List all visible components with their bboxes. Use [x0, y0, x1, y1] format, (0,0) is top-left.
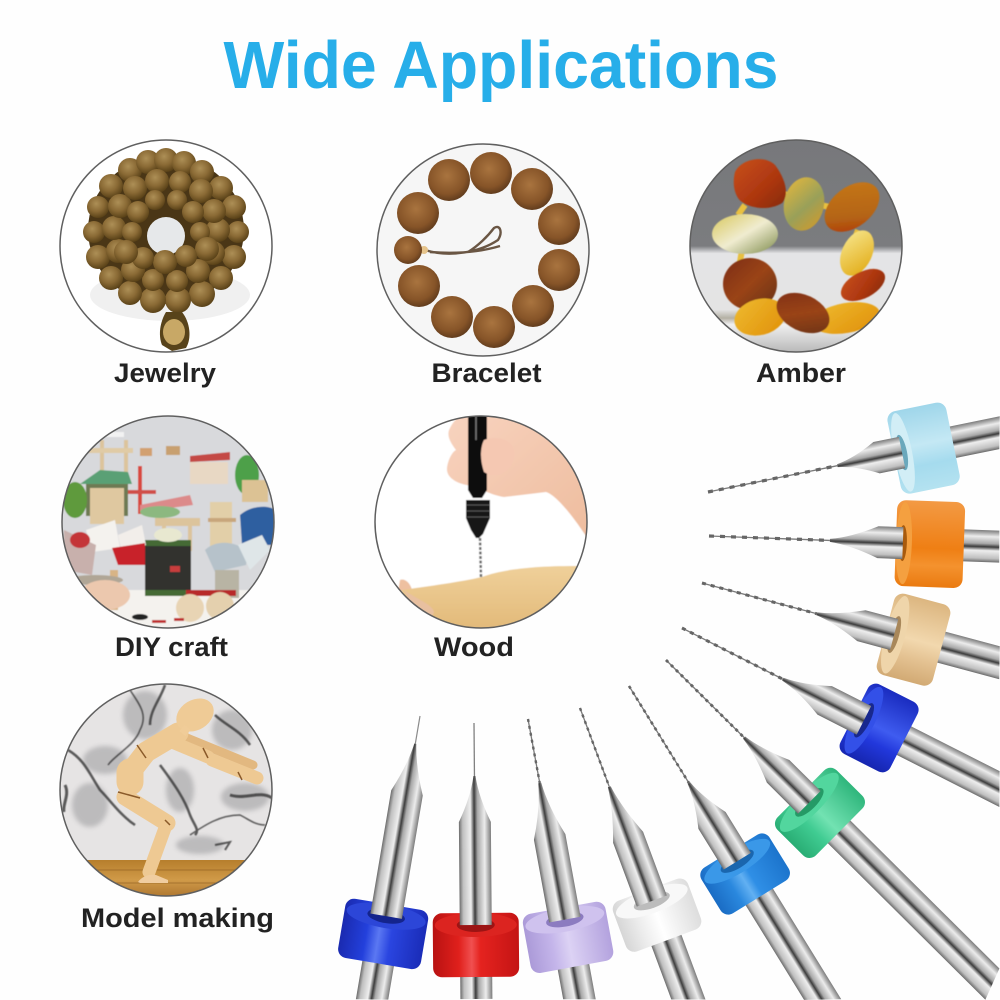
image: wooden bead bracelet [394, 152, 580, 348]
circle outline [60, 684, 272, 896]
panel: model making [59, 683, 273, 932]
image: hand drill on wood [398, 416, 586, 628]
label: Bracelet: Bracelet [432, 358, 542, 388]
image: wooden mannequin on marble [60, 684, 272, 896]
label: Amber: Amber [756, 358, 847, 388]
drill bit: tan collar 8 [691, 542, 1000, 704]
title: Wide Applications [224, 28, 778, 103]
circle outline [690, 140, 902, 352]
drill bit: lavender collar 3 [487, 711, 621, 1000]
drill bit: red collar 2 [431, 723, 519, 999]
drill bit: green collar 6 [636, 630, 1000, 1000]
panel: amber [690, 140, 902, 388]
panel: wood [374, 415, 588, 656]
circle outline [62, 416, 274, 628]
label: Wood: Wood [434, 632, 514, 662]
label: Model making: Model making [81, 903, 274, 933]
label: Jewelry: Jewelry [114, 358, 216, 388]
drill bit: orange collar 9 [707, 493, 1000, 590]
image: jewelry bead necklace [83, 148, 250, 351]
drill bit: dark blue collar 7 [664, 593, 1000, 827]
panel: bracelet [377, 144, 589, 388]
image: DIY miniature scene [60, 416, 280, 635]
panel: DIY craft [60, 416, 280, 662]
panel: jewelry [60, 140, 272, 388]
circle outline [60, 140, 272, 352]
circle outline [375, 416, 587, 628]
image: amber stones [690, 140, 902, 352]
drill bit: blue collar 1 [330, 709, 461, 1000]
label: DIY craft: DIY craft [115, 632, 228, 662]
drill bit: white collar 4 [543, 694, 728, 1000]
circle outline [377, 144, 589, 356]
drill bit set [330, 391, 1000, 1000]
drill bit: sky blue collar 5 [595, 665, 862, 1000]
drill bit: light blue collar 10 [700, 391, 1000, 533]
